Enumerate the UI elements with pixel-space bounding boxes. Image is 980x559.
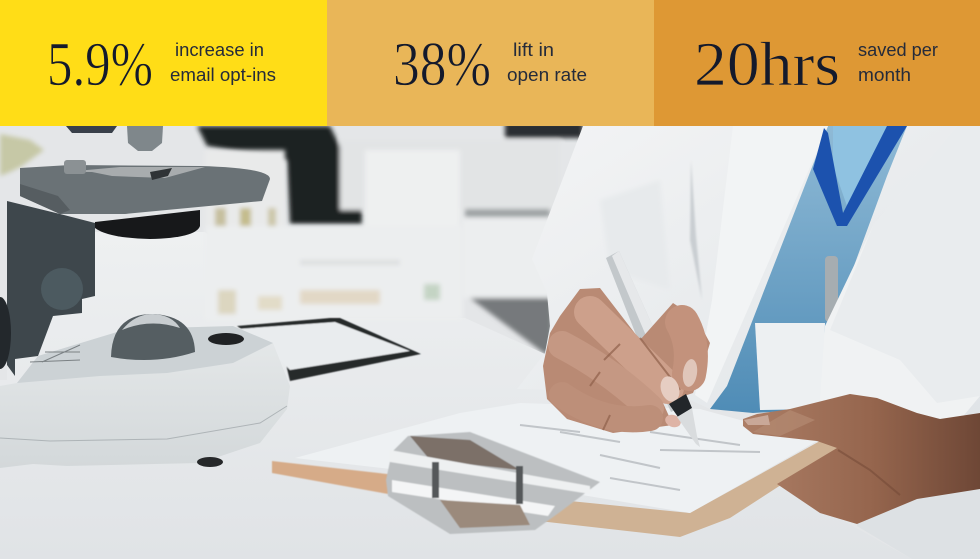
stage [20, 165, 270, 214]
sleeve fold shadow [690, 160, 702, 300]
blurred test tube rack [205, 150, 463, 320]
id badge holder [755, 323, 825, 410]
thumb nail [744, 415, 770, 425]
sleeve and body [517, 126, 980, 420]
nails [681, 358, 699, 388]
condenser [95, 210, 200, 239]
blurred background shelves and doorway [197, 122, 583, 354]
pen barrel [606, 251, 690, 412]
dial [0, 297, 11, 369]
coat lower right [857, 480, 980, 559]
coat placket [695, 126, 828, 403]
blurred plant [0, 134, 44, 176]
desk surface [0, 232, 912, 559]
stat caption: lift in open rate: open rate [507, 65, 587, 85]
base foot [197, 457, 223, 467]
stat panel: email opt-ins [0, 0, 327, 126]
stat value: 20hrs: 20hrs [694, 31, 840, 99]
focus knob [41, 268, 83, 310]
left hand holding clipboard [743, 394, 980, 524]
objective lenses [66, 126, 117, 133]
lanyard clip [825, 256, 838, 322]
stat caption: saved per month [858, 40, 938, 85]
photo: laboratory scene [0, 122, 980, 559]
stat caption: increase in email opt-ins [170, 40, 276, 85]
photo background wall [0, 126, 980, 559]
vent lines [30, 345, 80, 362]
blue scrubs [710, 126, 907, 413]
lab coat [517, 126, 980, 559]
arm [7, 201, 95, 376]
tablet on desk [237, 318, 421, 381]
paper [295, 403, 817, 513]
stat band [0, 0, 980, 126]
base button [208, 333, 244, 345]
stat caption: saved per month: month [858, 65, 911, 85]
stat panel: hours saved [654, 0, 980, 126]
finger creases [590, 338, 680, 430]
coat lapel [820, 126, 980, 420]
white pillar [0, 190, 7, 380]
lanyard [813, 126, 907, 226]
hand palm [543, 288, 710, 433]
stat panel: open rate [327, 0, 654, 126]
board left [272, 461, 396, 494]
stat caption: increase in email opt-ins: increase in [175, 40, 264, 60]
stat caption: increase in email opt-ins: email opt-ins [170, 65, 276, 85]
stat caption: lift in open rate: lift in [513, 40, 554, 60]
white base [0, 326, 290, 468]
pen tip [677, 408, 700, 447]
metal clip [386, 432, 600, 534]
stat value: 5.9%: 5.9% [47, 31, 153, 99]
stat value: 38%: 38% [393, 31, 491, 99]
base top face [17, 326, 273, 383]
base dome [111, 314, 195, 360]
seam line [0, 406, 287, 441]
clipboard and papers [272, 403, 838, 537]
board right [530, 441, 838, 537]
writing hand with pen [543, 251, 710, 447]
light collar [833, 126, 887, 206]
microscope [0, 126, 290, 468]
stat caption: saved per month: saved per [858, 40, 938, 60]
stat caption: lift in open rate [507, 40, 587, 85]
pen grip [669, 394, 692, 417]
fingers [590, 312, 668, 388]
